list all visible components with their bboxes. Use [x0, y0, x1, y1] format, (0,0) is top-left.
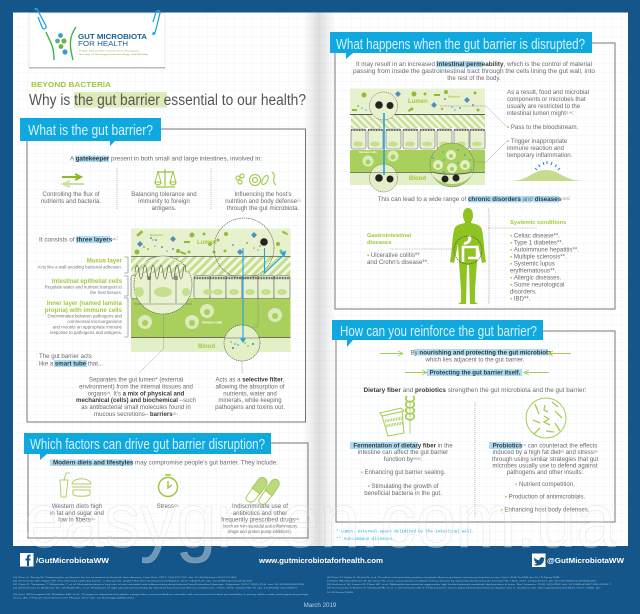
text: twitter handle: @GutMicrobiotaWW — [547, 556, 624, 565]
column: dietary fiber — [350, 396, 453, 497]
text: medication: Indiscriminate use of — [232, 503, 288, 510]
diagram: disrupted barrier: Lumen — [408, 99, 428, 105]
text: controlling flux — [41, 191, 101, 205]
text: separates the gut lumen: mechanical (cells) and biochemical –such — [76, 397, 196, 404]
text: dietary fiber and probiotics: Dietary fiber and probiotics strengthen the gut microbiota and the gut barrier: — [364, 387, 587, 394]
label: mucus layer — [38, 258, 123, 270]
text: western diets: in fat and sugar and — [50, 510, 104, 517]
label: mucus layer: Acts like a wall avoiding bacterial adhesion. — [38, 264, 122, 270]
references: left column: (5) Kant JR Frazgota LM, Madolon EM, et al. Changes in intestinal microbiota composition and metabolism coincide with increased intestinal permeability in young adults under prolonged physiologic — [13, 593, 309, 596]
text: systemic conditions: ▪ Multiple sclerosis**. — [510, 254, 567, 260]
references: left column: (2) Groschwitz KR, Hogan SP. The intestinal epithelial barrier: a therapeutic target? Nat Rev Gastroenterol Hepatol. 2017; 14(1):9-21. doi: 10.1038/nrgastro.2016.169. — [13, 580, 254, 582]
icon: twitter — [532, 554, 546, 567]
arrow: microbes cross barrier — [383, 113, 385, 175]
text: separates the gut lumen: (2) — [106, 391, 110, 395]
logo text: FOR HEALTH — [78, 39, 128, 48]
text: separates the gut lumen: . — [176, 410, 178, 416]
text: fermentation: ▪ Stimulating the growth of — [368, 483, 439, 490]
magnifier: selective filter — [214, 218, 274, 278]
text: gastrointestinal diseases: diseases — [367, 240, 392, 246]
icon: facebook — [20, 553, 34, 566]
text: consequences: ▪ Trigger inappropriate — [507, 138, 568, 145]
text: systemic conditions: erythematosus**. — [510, 268, 557, 274]
subtitle: beyond bacteria: BEYOND BACTERIA — [31, 82, 111, 89]
text: systemic conditions — [510, 220, 579, 302]
text: smart tube: The gut barrier acts — [39, 353, 92, 360]
text: probiotics: can counteract the effects — [526, 442, 597, 450]
main title: Why is the gut barrier essential to our health? — [29, 92, 306, 109]
callout lines — [139, 298, 258, 374]
immune cells — [359, 150, 398, 166]
references: left column — [13, 576, 309, 600]
text: probiotics: microbes usually use to defend against — [492, 462, 598, 470]
references: right column: (8) Hathcock JH, Lamas B, Pham HP, et al. Bifidophila bacteriothrix aggravates high fat diet-induced metabolic dysfunctions in mice. Nat Commun. 2018; 9(1):2802. doi: 10.1038/s41467-018-05249-7. — [327, 583, 613, 586]
text: three layers: It consists of three layers — [39, 236, 111, 244]
text: probiotics: ▪ Nutrient competition. — [515, 481, 575, 488]
text: fermentation: beneficial bacteria in the gut. — [364, 490, 442, 497]
text: stress: Stress — [157, 503, 174, 510]
text: three layers: : — [116, 235, 118, 242]
text: medication: antibiotics and other — [233, 510, 287, 517]
text: consequences — [507, 89, 589, 159]
text: consequences: usually are restricted to the — [507, 103, 581, 110]
footnotes: * Lumen: external space delimited by the intestinal wall. — [336, 530, 474, 534]
text: probiotics — [489, 442, 598, 514]
text: separates the gut lumen: (2) — [173, 412, 176, 416]
text: nourishing and protecting: By nourishing and protecting the gut microbiota — [410, 350, 552, 356]
text: balancing tolerance: antigens. — [152, 205, 177, 212]
text: selective filter: minerals, while keeping — [218, 397, 282, 404]
text: probiotics: Probiotics — [493, 442, 523, 450]
icon: arrows — [62, 174, 84, 187]
text: fermentation — [350, 442, 453, 497]
magnifier: tissue detail — [134, 256, 192, 314]
magnifier: blood — [224, 325, 260, 361]
text: systemic conditions: disorders. — [510, 288, 537, 296]
label: inner layer: and mounts an appropriate immune — [53, 324, 123, 330]
text: influencing host — [225, 191, 301, 212]
text: separates the gut lumen: a mix of physical and — [123, 390, 185, 398]
text: controlling flux: Controlling the flux of — [42, 191, 100, 198]
text: selective filter: allowing the absorption of — [215, 384, 285, 390]
roles: three columns — [41, 168, 301, 212]
label: inner layer: Discriminates between pathogens and — [48, 314, 123, 318]
references: right column — [327, 576, 613, 594]
references: right column: (9) Vanhaecke T, Aubert P, Grohard PA, et al. L. fermentum CECT 5716 prevents stress-induced intestinal barrier dysfunction in newborn rats. Neurogastroenterol Motil. 2017; 29(8). doi: — [327, 586, 602, 590]
text: probiotics: ▪ Production of antimicrobials. — [505, 494, 586, 500]
references: right column: (7) Bron PA, Kleerebezem M, Brummer RJ, et al. Can probiotics modulate human disease by impacting intestinal barrier function? Br J Nutr. 2017; 117(1):93-107. doi: 10.1017/S0007114516004037. — [327, 580, 598, 582]
text: intestinal permeability — [353, 61, 596, 82]
text: medication: (such as non-steroidal anti-inflammatory — [223, 524, 298, 528]
references: left column: (4) Ulluwishewa D, Anderson RC, McNabb WC, et al. Regulation of tight junction permeability by intestinal bacteria and dietary components. J Nutr. 2011; 141(5):769-76. doi: 10.3945/jn.110.135657. — [13, 586, 299, 590]
text: probiotics: ▪ Enhancing host body defenses. — [501, 506, 590, 514]
icon: gut — [463, 236, 477, 262]
text: gastrointestinal diseases: Gastrointestinal — [367, 233, 412, 239]
panel: which factors — [24, 433, 308, 538]
text: separates the gut lumen: organs — [88, 390, 106, 398]
diagram: gut barrier layers: Blood — [198, 344, 215, 350]
label: inner layer: propria) with immune cells — [45, 307, 123, 314]
icon: yogurt and wheat — [380, 396, 414, 436]
text: systemic conditions: ▪ IBD**. — [510, 296, 531, 302]
panel: how can you reinforce — [332, 320, 615, 522]
column: probiotics — [489, 398, 598, 514]
text: separates the gut lumen: Separates the gut lumen* (external — [89, 376, 183, 384]
text: smart tube: like a smart tube that... — [39, 360, 103, 368]
immune cells — [138, 304, 282, 329]
text: consequences: ▪ Pass to the bloodstream. — [507, 124, 579, 131]
text: probiotics: and stress — [564, 449, 594, 456]
text: facebook handle: /GutMicrobiotaWW — [36, 556, 109, 565]
text: gatekeeper intro: A gatekeeper present in both small and large intestines, involved in: — [70, 156, 262, 162]
text: separates the gut lumen: environment) from the internal tissues and — [79, 384, 193, 390]
footnotes: ** Autoimmune diseases. — [336, 537, 395, 542]
text: stress: . — [178, 502, 179, 508]
heading: what is the gut barrier — [20, 118, 161, 146]
text: medication: (3) — [295, 517, 299, 521]
heading: what is the gut barrier: What is the gut barrier? — [28, 122, 153, 139]
text: protecting the barrier: Protecting the gut barrier itself. — [430, 370, 521, 376]
text: selective filter: pathogens and toxins out. — [215, 404, 285, 411]
logo text: Public information service from European — [79, 50, 140, 52]
text: chronic disorders: This can lead to a wide range of chronic disorders and diseases — [378, 196, 561, 203]
text: medication: drugs and proton pump inhibitors). — [228, 529, 292, 534]
text: probiotics: induced by a high fat diet — [493, 449, 560, 456]
text: probiotics: (7) — [522, 443, 526, 447]
text: nourishing and protecting — [380, 349, 571, 364]
label: inner layer: Inner layer (named lamina — [47, 300, 123, 307]
text: probiotics: (9) — [594, 450, 597, 454]
text: selective filter — [215, 376, 285, 411]
text: systemic conditions: ▪ Type 1 diabetes**. — [510, 240, 564, 246]
factor: stress — [157, 475, 180, 510]
text: website: www.gutmicrobiotaforhealth.com — [258, 556, 384, 565]
text: consequences: (1,4) — [566, 110, 572, 114]
text: systemic conditions: ▪ Autoimmune hepatitis**. — [510, 246, 579, 254]
text: chronic disorders: : — [569, 194, 570, 202]
text: probiotics: (8) — [560, 450, 564, 454]
references: right column: 10.1111/nmo.13069. — [327, 592, 355, 594]
label: inner layer: commensal microorganisms — [67, 319, 123, 324]
text: fermentation: ▪ Enhancing gut barrier sealing. — [361, 469, 446, 476]
footnotes — [336, 530, 474, 542]
icon: clock — [158, 475, 178, 496]
arrows: absorption routes — [241, 248, 286, 342]
text: fermentation: (4)(5) — [413, 456, 421, 460]
magnifier: microbes in lumen — [370, 92, 398, 120]
text: smart tube — [39, 353, 103, 368]
factor: western diets — [50, 473, 104, 524]
text: systemic conditions: ▪ Celiac disease**. — [510, 232, 560, 240]
icon: petri dish with microbes — [526, 398, 566, 438]
diagram: gut barrier layers: Nutrients — [150, 233, 163, 237]
text: influencing host: Influencing the host's — [234, 191, 292, 198]
heading: which factors: Which factors can drive gut barrier disruption? — [30, 436, 265, 453]
label: epithelial cells: the host tissues. — [90, 290, 122, 295]
label: inner layer — [45, 300, 123, 335]
factor: medication — [221, 478, 299, 534]
text: three layers: (2) — [112, 237, 116, 241]
text: consequences: : — [572, 110, 574, 117]
logo card — [29, 13, 165, 68]
lumen bacteria — [352, 90, 480, 112]
text: selective filter: Acts as a selective filter, — [215, 376, 285, 384]
heading: reinforce — [332, 320, 543, 347]
footer: social links — [20, 553, 624, 567]
text: consequences: As a result, food and microbial — [507, 89, 589, 96]
logo text — [78, 32, 150, 56]
icon: inflammation bump — [511, 161, 583, 181]
text: systemic conditions: Systemic conditions — [510, 220, 566, 226]
text: separates the gut lumen: mucous secretions– barriers — [94, 411, 173, 418]
diagram: disrupted barrier: Nutrients — [448, 94, 461, 98]
text: selective filter: nutrients, water and — [223, 390, 277, 398]
diagram: gut barrier layers — [131, 218, 290, 361]
heading: which factors — [24, 433, 271, 460]
text: separates the gut lumen — [76, 376, 196, 418]
text: consequences: intestinal lumen might — [507, 110, 566, 117]
label: epithelial cells: Intestinal epithelial cells — [52, 278, 123, 285]
text: western diets: (3) — [90, 517, 94, 521]
icon: capsules — [246, 478, 279, 504]
text: probiotics: pathogens and other insults: — [507, 469, 584, 476]
text: influencing host: nutrition and body defense — [225, 198, 297, 205]
icon: burger and drink — [60, 473, 91, 497]
logo text: GUT MICROBIOTA — [78, 32, 148, 41]
epithelial cells — [131, 276, 290, 298]
icon: microbes — [236, 172, 276, 186]
text: consequences: temporary inflammation. — [507, 152, 573, 159]
references: right column: (6) Pham VT, Seifert N, Richard N, et al. The effects of fermentation products of prebiotic fibres on gut barrier and immune functions in vitro. PeerJ. 2018; 6:e5288. doi: 10.7717/peerj.5288. — [327, 576, 561, 579]
text: fermentation: function by — [384, 456, 413, 463]
label: mucus layer: Mucus layer — [87, 258, 123, 264]
logo text: Society of Neurogastroenterology and Motility — [79, 53, 150, 56]
text: intestinal permeability: passing from inside the gastrointestinal tract through the cells lining the gut wall, into — [353, 68, 596, 75]
text: gastrointestinal diseases: and Crohn's disease**. — [367, 259, 429, 266]
icon: paper clips — [35, 9, 160, 35]
text: gastrointestinal diseases: ▪ Ulcerative colitis** — [367, 252, 420, 259]
icon: human body — [450, 208, 486, 304]
diagram: gut barrier layers: Lumen — [197, 240, 217, 246]
text: western diets — [50, 503, 104, 524]
text: fermentation: Fermentation of dietary fiber in the — [353, 442, 453, 450]
label: epithelial cells — [45, 278, 123, 295]
text: systemic conditions: ▪ Systemic lupus — [510, 260, 555, 268]
heading: reinforce: How can you reinforce the gut barrier? — [340, 323, 537, 340]
label: inner layer: response to pathogens and antigens. — [50, 330, 122, 335]
text: intestinal permeability: It may result in an increased intestinal permeability , which is the control of material — [356, 61, 592, 68]
icon: scale — [155, 169, 176, 187]
text: systemic conditions: ▪ Some neurological — [510, 282, 564, 288]
text: consequences: components or microbes that — [507, 96, 586, 103]
callout lines — [440, 106, 507, 162]
label: epithelial cells: Regulate water and nutrient transport to — [45, 284, 123, 290]
references: left column: stress. Am J Physiol Gastrointest Liver Physiol. 2017. doi: 10.1152/ajpgi.00066.2017. — [13, 596, 136, 600]
text: balancing tolerance: immunity to foreign — [138, 198, 190, 205]
text: medication: frequently prescribed drugs — [221, 516, 295, 524]
diagram: disrupted barrier — [350, 88, 507, 192]
text: western diets: low in fibers — [58, 516, 90, 524]
text: stress: (3) — [174, 504, 178, 508]
text: probiotics: through using similar strategies that gut — [492, 456, 598, 463]
icon: logo mark — [46, 27, 76, 60]
text: controlling flux: nutrients and bacteria. — [41, 198, 101, 205]
lumen bacteria — [134, 230, 288, 255]
text: western diets: Western diets high — [52, 503, 102, 510]
watermark: easygreen.com.ua — [24, 478, 616, 564]
text: systemic conditions: ▪ Allergic diseases. — [510, 274, 562, 282]
text: influencing host: through the gut microbiota. — [227, 205, 300, 212]
labels: barrier layers — [38, 257, 128, 337]
references: left column: (3) Otani K, Tanigawa T, Watanabe T, et al. Microbiota plays a key role in non-steroidal anti-inflammatory drug-induced small intestinal damage. Digestion. 2017; 95(1):22-8. doi: 10.1159/000452356. — [13, 583, 306, 586]
references: left column: (1) Zhou Z, Zhong W. Targeting the gut barrier for the treatment of alcoholic liver disease. Liver Res. 2017; 1(4):197-207. doi: 10.1016/j.livres.2017.12.004. — [13, 576, 238, 579]
immune cells: Immune cells — [359, 150, 377, 154]
panel: what happens when disrupted — [330, 32, 615, 309]
text: protecting the barrier — [405, 369, 549, 376]
text: gastrointestinal diseases — [367, 233, 429, 266]
text: separates the gut lumen: . It's — [110, 390, 123, 398]
text: fermentation: intestine can affect the gut barrier — [358, 449, 448, 456]
text: fermentation: : — [421, 456, 423, 463]
text: consequences: immune reaction and — [507, 145, 564, 152]
text: separates the gut lumen: as antibacterial small molecules found in — [81, 404, 191, 411]
text: balancing tolerance: Balancing tolerance and — [131, 191, 197, 198]
text: balancing tolerance — [131, 191, 197, 212]
immune cells: Immune cells — [202, 320, 222, 324]
diagram: disrupted barrier: Blood — [409, 176, 426, 182]
text: intestinal permeability: the rest of the body. — [447, 75, 501, 82]
text: nourishing and protecting: which lies adjacent to the gut barrier. — [425, 356, 525, 364]
magnifier: microbes in blood — [370, 164, 398, 192]
panel: what is the gut barrier — [20, 118, 306, 422]
text: influencing host: (1) — [297, 198, 301, 202]
date: March 2019 — [304, 602, 337, 609]
text: western diets: . — [94, 515, 96, 522]
text: modern diets: Modern diets and lifestyles may compromise people's gut barrier. They include: — [53, 460, 278, 466]
heading: what happens — [330, 32, 592, 59]
text: chronic disorders: (2)(3) — [561, 196, 569, 200]
text: medication — [221, 503, 299, 534]
magnifier: immune reaction — [430, 143, 474, 187]
